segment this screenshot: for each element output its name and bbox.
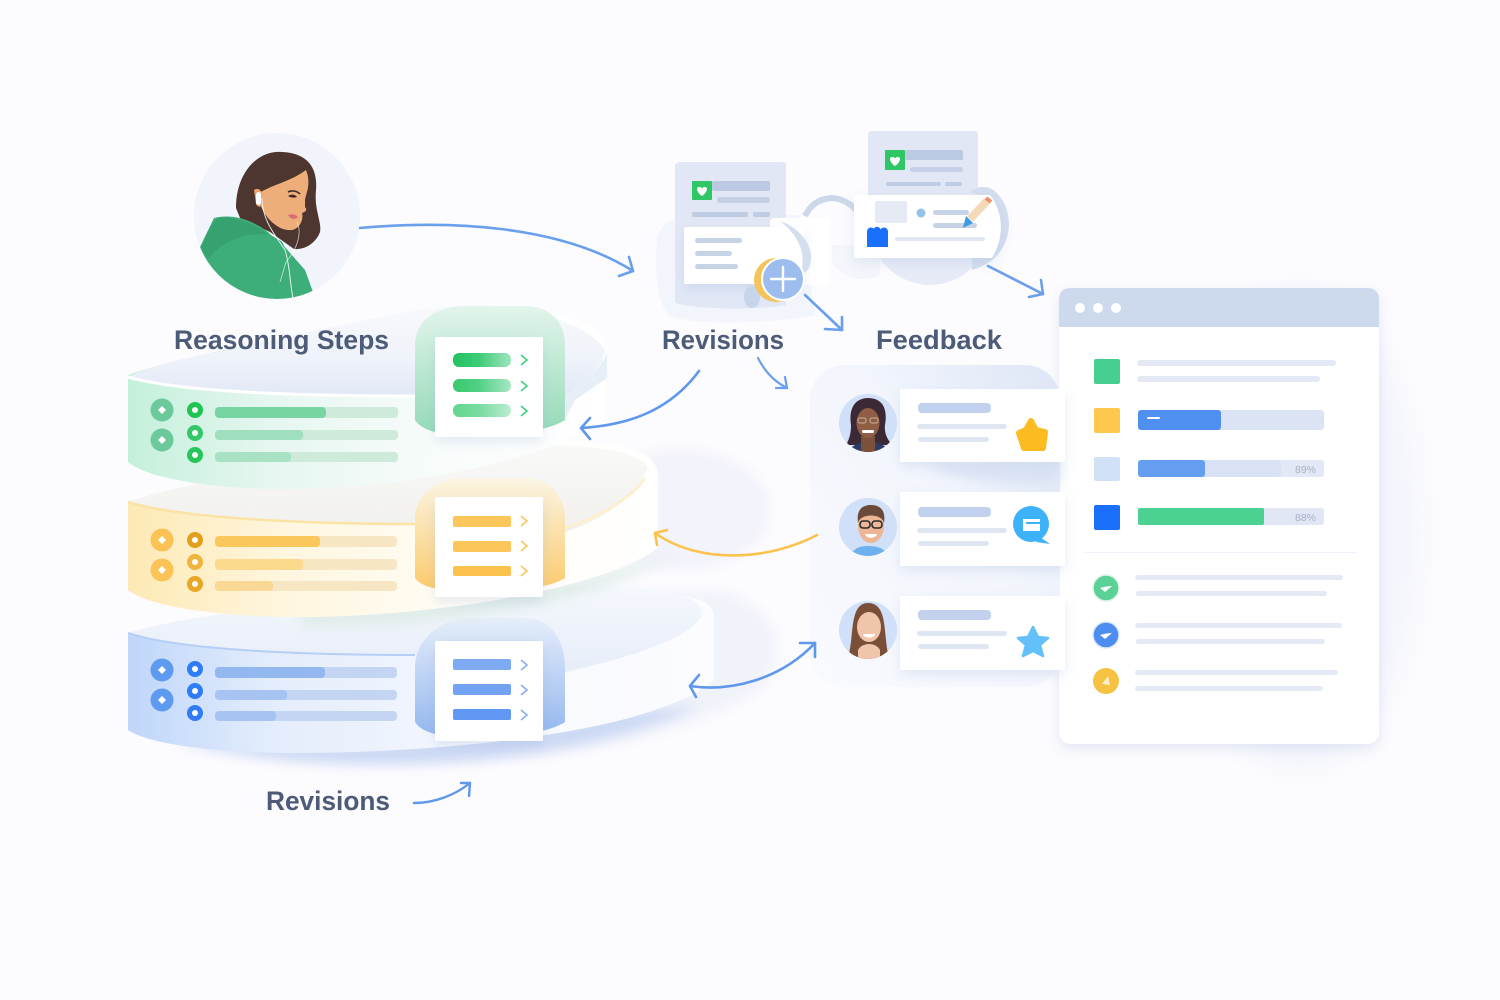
panel tab: blue [415, 618, 565, 738]
icon: blue hands [867, 227, 888, 247]
icon: plus button [744, 258, 804, 308]
arrow: revisions down to panel [758, 358, 787, 388]
layer: green disc [128, 305, 607, 489]
arrow: feedback to yellow disc [655, 530, 817, 555]
arrow: portrait to revisions [360, 225, 633, 276]
reviewer card 3 [900, 596, 1065, 670]
row 3: pale square and bar [1094, 457, 1324, 481]
panel tab: green [415, 306, 565, 436]
panel tab: yellow [415, 478, 565, 592]
arrow: feedback to dashboard [988, 266, 1043, 297]
heading: Revisions: Revisions [662, 325, 784, 355]
arrow: revisions to feedback [805, 295, 842, 330]
card: yellow checklist [435, 497, 543, 597]
list item: yellow alert [1093, 668, 1338, 694]
reviewer card 1 [900, 389, 1065, 462]
soft shadow behind dashboard [1180, 290, 1420, 770]
heading: Revisions lower: Revisions [266, 786, 390, 816]
portrait: woman with earphones [194, 133, 360, 310]
crescent behind feedback card [970, 187, 1009, 270]
avatar: reviewer woman with glasses [839, 394, 897, 455]
heading: Feedback: Feedback [876, 325, 1003, 355]
icon group: revisions documents [656, 162, 831, 322]
arrow: revisions to green disc [581, 371, 699, 439]
card: blue checklist [435, 641, 543, 741]
avatar: reviewer woman with long hair [839, 601, 897, 662]
icons and bars: yellow list [150, 528, 397, 592]
icon group: feedback documents [805, 131, 1009, 285]
row 1: green square [1094, 359, 1336, 384]
icon: pencil [963, 198, 991, 228]
document back: feedback [868, 131, 978, 211]
panel: feedback reviewers [810, 365, 1065, 687]
row 3: pale square and bar: 89% [1295, 464, 1316, 476]
card: green checklist [435, 337, 543, 437]
avatar: reviewer man with glasses [839, 498, 897, 560]
white note card: revisions [684, 218, 831, 285]
list item: blue check [1093, 622, 1342, 648]
arrow: two-way feedback and blue disc [690, 643, 815, 697]
icons and bars: green list [150, 398, 398, 463]
list item: green check [1093, 575, 1343, 601]
layer: yellow disc [128, 440, 770, 626]
row 4: blue square and bar [1094, 505, 1324, 530]
heading: Reasoning Steps: Reasoning Steps [174, 325, 389, 355]
panel: dashboard window [1059, 288, 1379, 744]
reviewer card 2 [900, 492, 1065, 566]
row 4: blue square and bar: 88% [1295, 512, 1316, 524]
layer: blue revisions disc [128, 584, 778, 764]
icons and bars: blue list [150, 658, 397, 721]
arrow: lower revisions [414, 783, 470, 803]
window header [1059, 288, 1379, 327]
document back: revisions [675, 162, 786, 309]
white note card: feedback [854, 195, 1001, 258]
row 2: yellow square and bar [1094, 408, 1324, 433]
